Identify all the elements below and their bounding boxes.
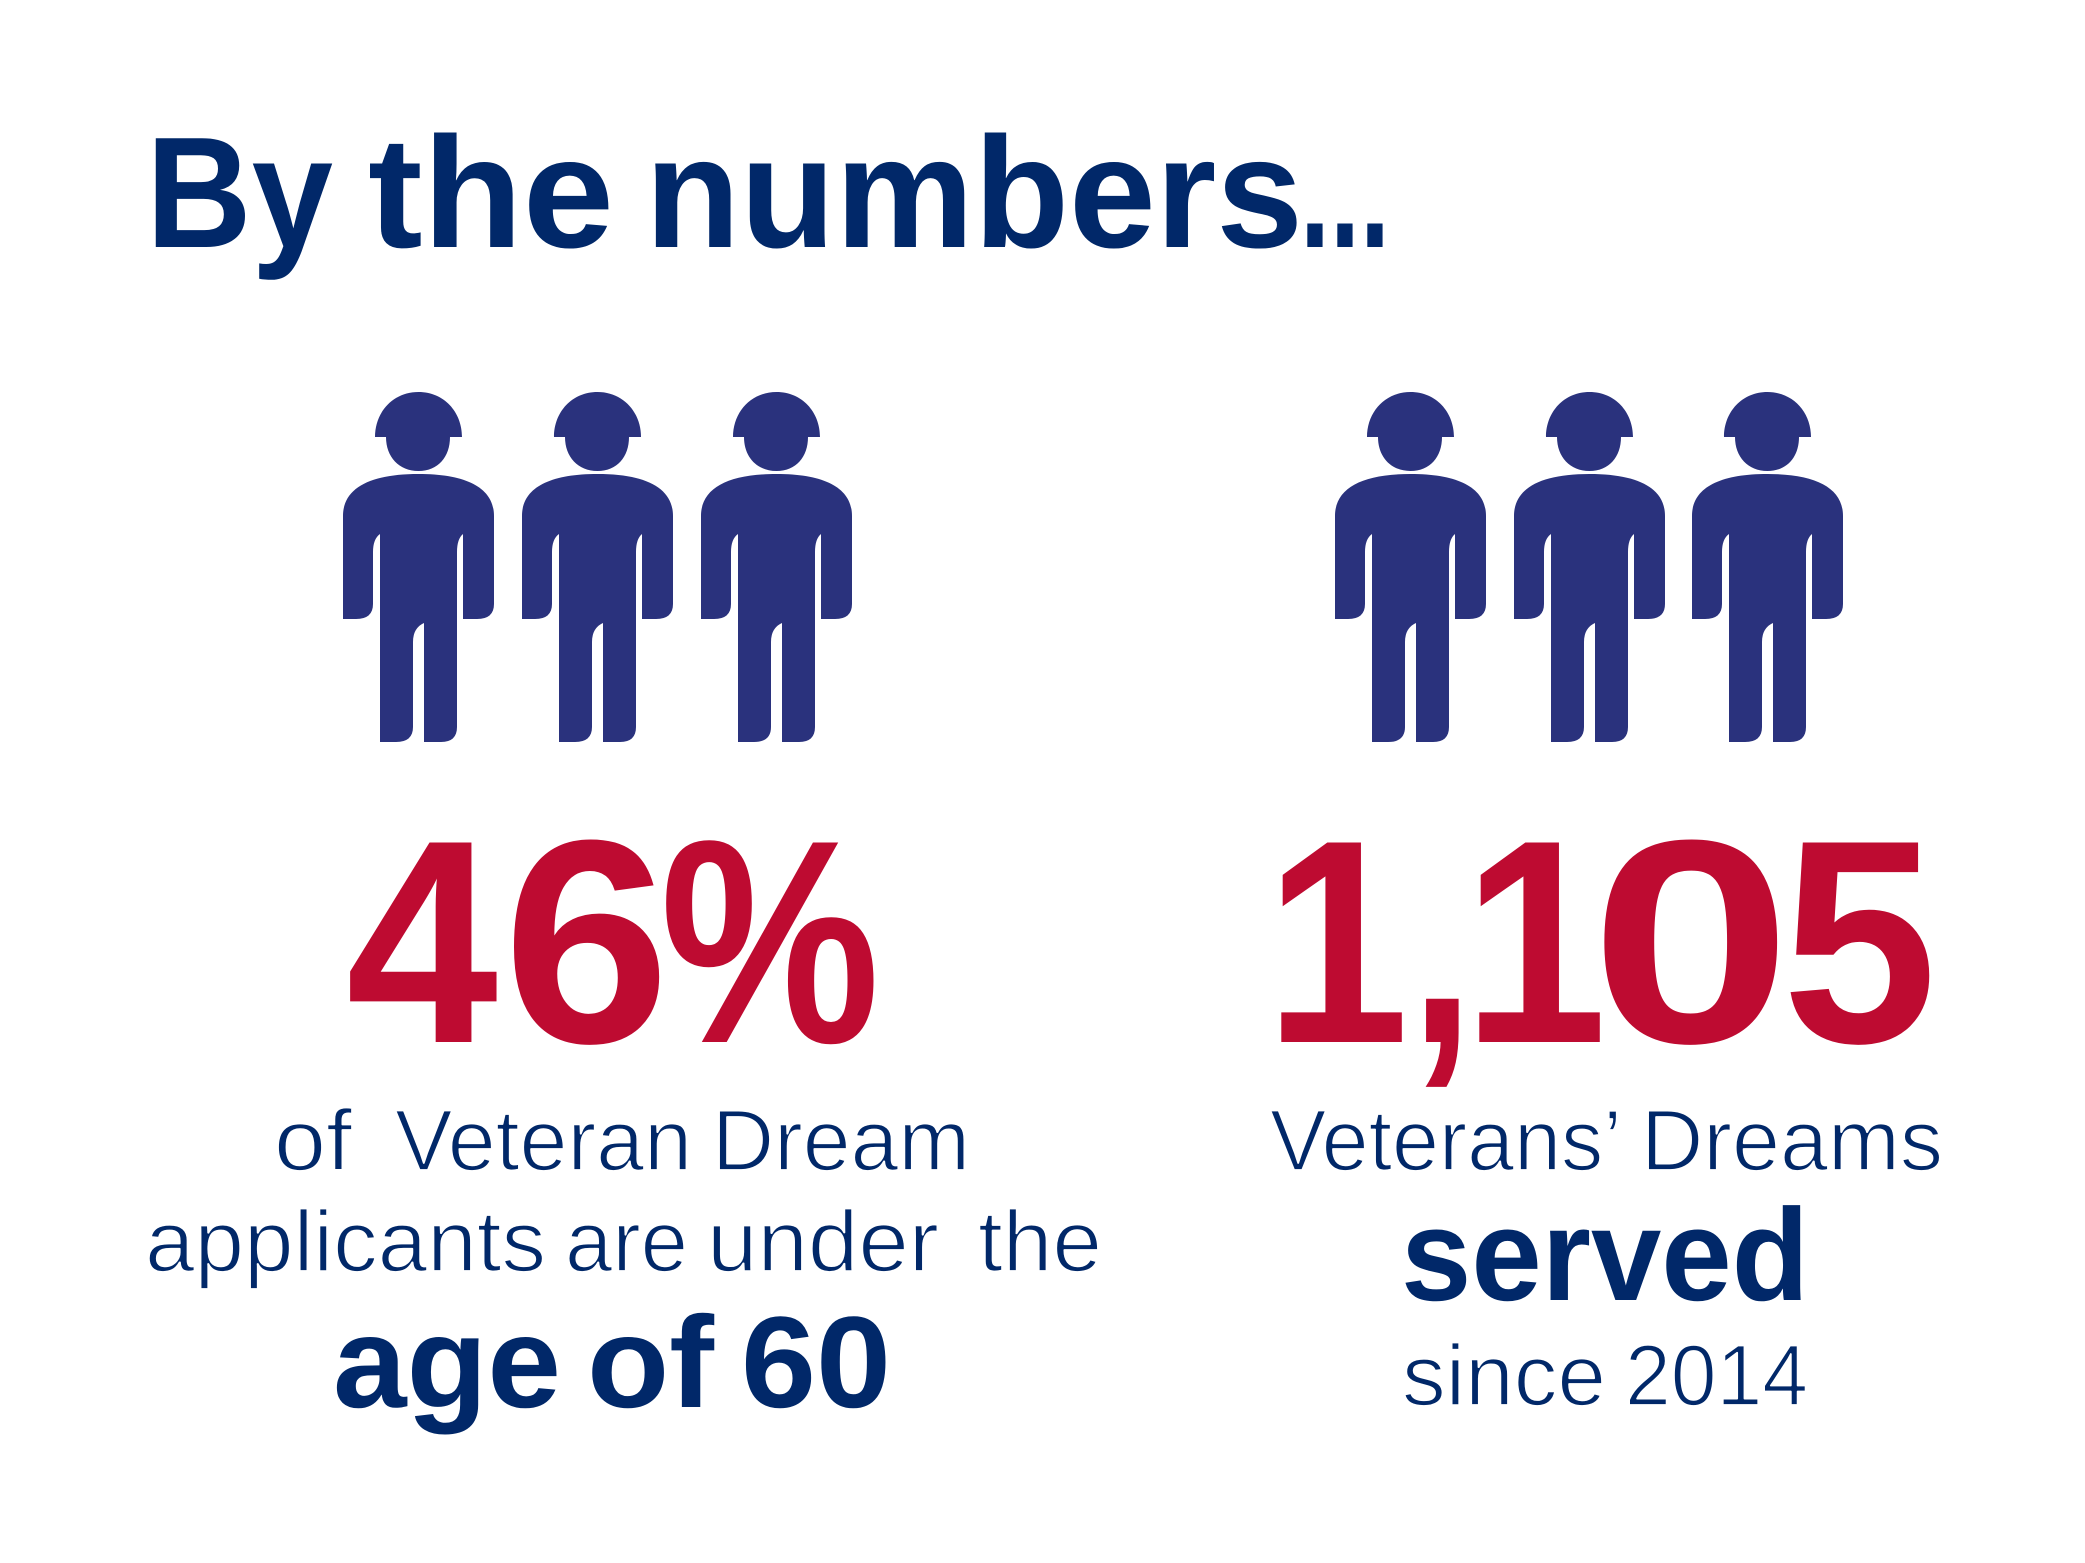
right statistic: 1,105: 1 <box>1463 780 1607 1104</box>
right statistic: 1,105: , <box>1410 780 1474 1104</box>
title <box>146 105 1390 281</box>
right statistic: 1,105: 5 <box>1782 780 1937 1104</box>
left caption line 1: Veteran <box>395 1093 692 1189</box>
title: By <box>146 105 333 281</box>
left statistic: 46% <box>346 780 880 1104</box>
right statistic: 1,105: 1 <box>1265 780 1409 1104</box>
right caption line 1 <box>1270 1093 1943 1189</box>
left caption line 1: of <box>274 1093 353 1189</box>
left caption emphasis: of <box>587 1289 715 1435</box>
title: ... <box>1300 105 1390 281</box>
right caption emphasis: served <box>1401 1181 1809 1328</box>
title: the <box>368 105 614 281</box>
right statistic: 1,105 <box>1265 780 1937 1104</box>
left caption emphasis: 60 <box>741 1289 891 1435</box>
left caption emphasis <box>333 1289 891 1435</box>
right caption line 1: Veterans’ <box>1270 1093 1622 1189</box>
left caption line 2: are <box>565 1194 688 1290</box>
left caption line 2: applicants <box>145 1194 546 1290</box>
left caption line 2 <box>145 1194 1102 1290</box>
right caption line 3: since <box>1402 1328 1606 1424</box>
left statistic: 46%: % <box>660 780 880 1104</box>
right caption line 3 <box>1402 1328 1808 1424</box>
title: numbers <box>645 105 1303 281</box>
left caption line 2: the <box>978 1194 1102 1290</box>
left caption emphasis: age <box>333 1289 561 1435</box>
left statistic: 46%: 6 <box>503 780 670 1104</box>
right caption line 1: Dreams <box>1641 1093 1943 1189</box>
right statistic: 1,105: 0 <box>1590 780 1792 1104</box>
icon group: three people, right <box>1335 392 1843 742</box>
left statistic: 46%: 4 <box>346 780 500 1104</box>
icon group: three people, left <box>343 392 852 742</box>
right caption line 3: 2014 <box>1625 1328 1808 1424</box>
left caption line 1: Dream <box>712 1093 970 1189</box>
left caption line 1 <box>274 1093 970 1189</box>
left caption line 2: under <box>707 1194 939 1290</box>
